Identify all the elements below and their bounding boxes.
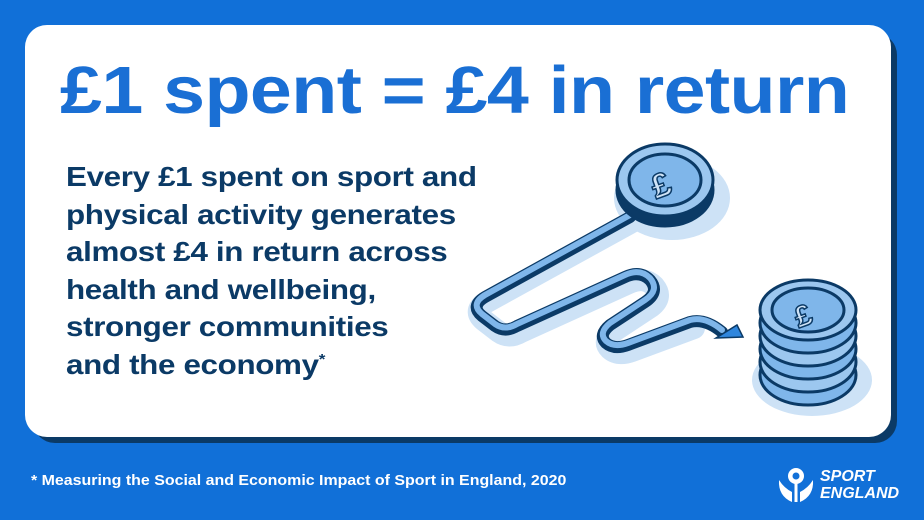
- text block: body: physical activity generates: [66, 198, 456, 230]
- text block: body: Every £1 spent on sport and: [66, 161, 477, 192]
- text block: body: stronger communities: [66, 311, 388, 342]
- text block: body: and the economy*: [66, 348, 325, 380]
- arrow head: [716, 325, 743, 338]
- text block: body: [66, 161, 477, 380]
- logo: Sport England: SPORT: [820, 468, 875, 485]
- icon: coin stack: £: [790, 298, 817, 335]
- path: [477, 217, 722, 347]
- text block: body: almost £4 in return across: [66, 236, 447, 267]
- logo: Sport England: ENGLAND: [820, 485, 899, 502]
- text block: body: health and wellbeing,: [66, 274, 376, 304]
- panel: main card: [25, 25, 891, 437]
- logo: Sport England: [779, 468, 899, 502]
- footnote: * Measuring the Social and Economic Impact of Sport in England, 2020: [31, 473, 566, 489]
- icon: single coin: [617, 144, 713, 226]
- icon: coin stack: [760, 280, 856, 405]
- icon: single coin: £: [646, 165, 677, 207]
- title: £1 spent = £4 in return: [60, 53, 849, 128]
